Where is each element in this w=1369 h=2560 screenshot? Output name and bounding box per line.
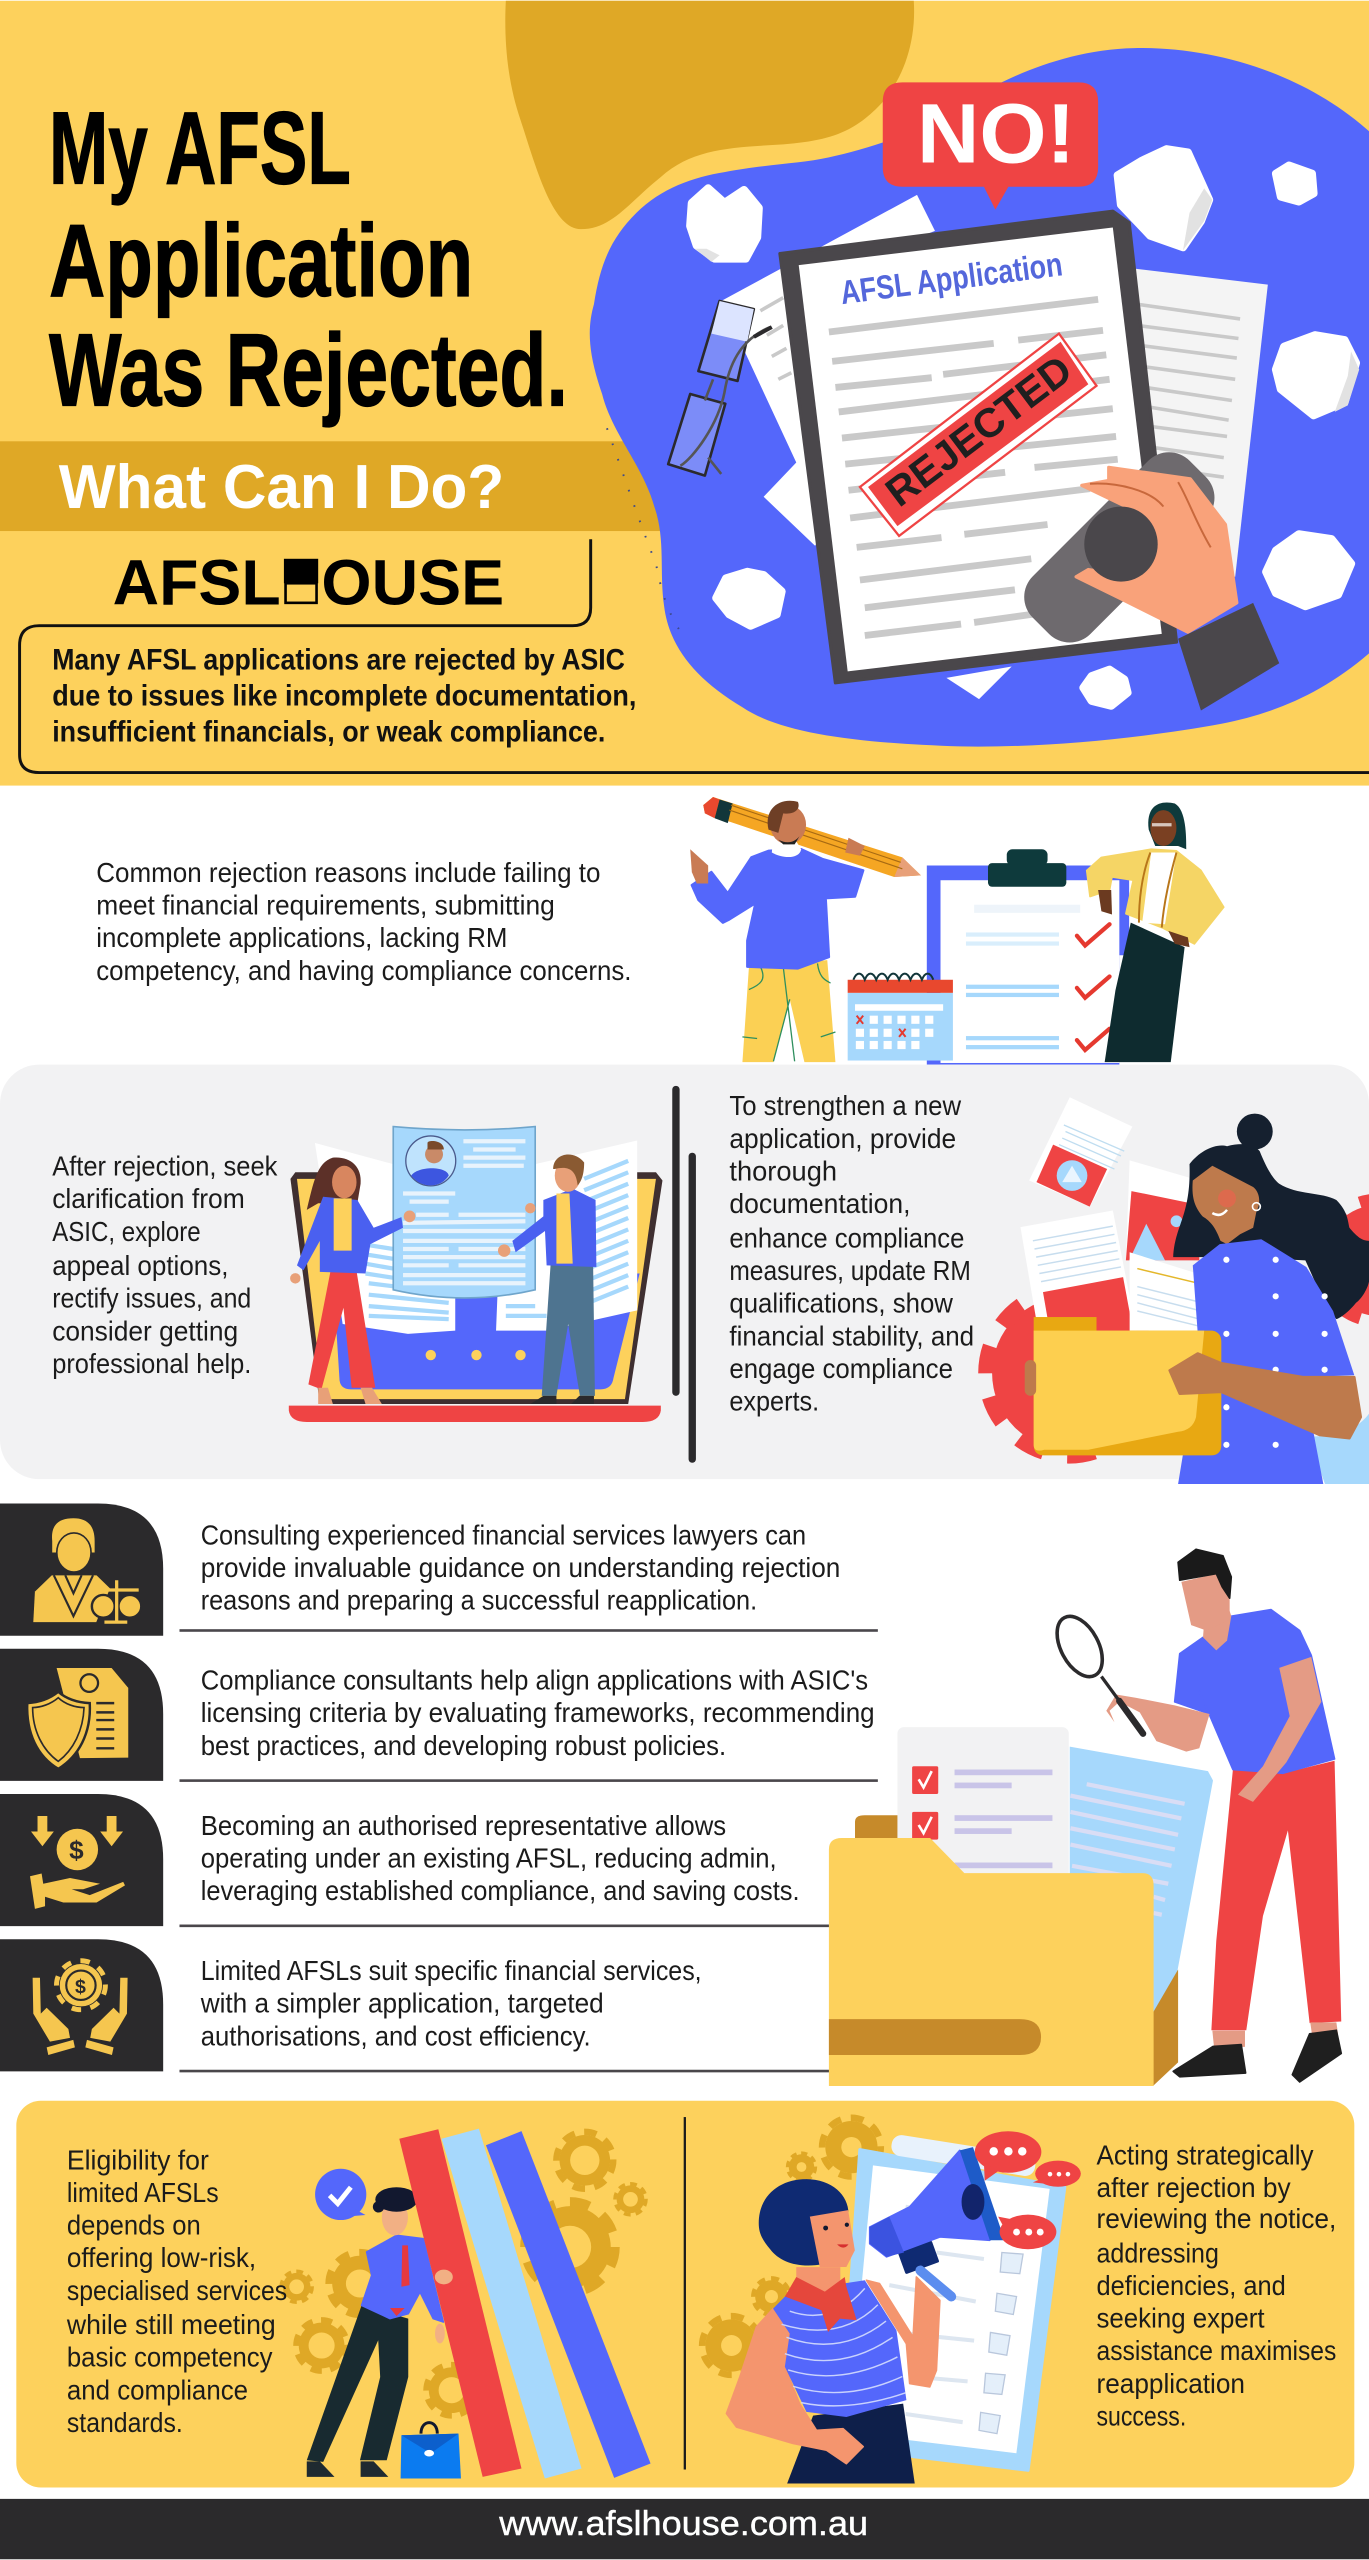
back paper right — [1132, 268, 1268, 577]
illustration: man with books — [307, 2129, 651, 2478]
text block: strategic: success. — [1097, 2400, 1186, 2431]
text: with a simpler application, targeted — [200, 1988, 604, 2019]
text: leveraging established compliance, and saving costs. — [201, 1875, 800, 1906]
pencil — [703, 797, 921, 877]
woman with yellow jacket — [1087, 802, 1224, 1062]
scarf — [785, 2277, 857, 2332]
illustration: man inspecting folder — [829, 1549, 1341, 2086]
text block: meet financial requirements, submitting — [96, 889, 555, 920]
text: Compliance consultants help align applications with ASIC's — [201, 1665, 868, 1696]
panel: after rejection and strengthen — [0, 1065, 1369, 1484]
text block: incomplete applications, lacking RM — [96, 922, 507, 953]
tab icon: hand with coin — [0, 1794, 163, 1926]
hand on book — [435, 2270, 453, 2284]
title — [49, 90, 568, 427]
shirt — [773, 2280, 906, 2417]
blue sheet — [1070, 1747, 1213, 2013]
back sheet right — [496, 1140, 637, 1331]
folder — [1034, 1317, 1097, 1332]
panel: hero header — [0, 1, 1369, 786]
intro callout box — [20, 539, 1369, 773]
text: licensing criteria by evaluating frameworks, recommending — [201, 1697, 875, 1728]
footer — [0, 2499, 1369, 2559]
tab icon: hand with coin: $ — [69, 1835, 84, 1865]
text block: eligibility: depends on — [67, 2210, 201, 2241]
text: best practices, and developing robust policies. — [201, 1730, 726, 1761]
light blue blob — [1309, 1414, 1369, 1484]
text: Becoming an authorised representative allows — [201, 1810, 726, 1841]
text block: strengthen: engage compliance — [729, 1353, 953, 1384]
clipboard — [840, 2150, 1065, 2470]
text: Consulting experienced financial services lawyers can — [201, 1519, 806, 1550]
books — [399, 2129, 521, 2477]
man — [307, 2187, 453, 2477]
text block: strategic: reviewing the notice, — [1097, 2203, 1336, 2234]
text block: after rejection: appeal options, — [52, 1250, 228, 1281]
dots: decorative trail — [607, 428, 679, 629]
blob: blue background — [590, 48, 1369, 747]
tab icon: hands with gear — [0, 1939, 163, 2071]
text block: eligibility — [66, 2144, 287, 2438]
illustration: rejected application — [668, 82, 1359, 711]
text block: competency, and having compliance concerns. — [96, 955, 631, 986]
skirt — [787, 2404, 915, 2484]
glasses — [668, 301, 772, 476]
tab icon: lawyer — [0, 1504, 163, 1636]
paper sheet — [799, 228, 1162, 671]
man — [498, 1154, 596, 1404]
back sheet left — [315, 1143, 455, 1334]
footer: www.afslhouse.com.au — [498, 2505, 868, 2543]
checklist paper — [897, 1727, 1069, 1882]
title: Application — [49, 203, 473, 318]
arm right — [866, 2277, 940, 2387]
check bubble — [315, 2169, 366, 2220]
tab icon: shield and document — [0, 1649, 163, 1781]
man — [1106, 1549, 1341, 2082]
subtitle: What Can I Do? — [59, 453, 504, 522]
text block: strengthen: thorough — [729, 1155, 837, 1186]
text — [201, 1665, 875, 1761]
text block: eligibility: specialised services — [67, 2275, 287, 2306]
text block: eligibility: basic competency — [67, 2342, 273, 2373]
tab icon: hands with gear: $ — [75, 1976, 86, 1998]
text block: after rejection: clarification from — [52, 1183, 245, 1214]
red gears — [987, 1200, 1369, 1455]
row: limited AFSLs — [0, 1939, 702, 2071]
divider — [684, 2117, 686, 2470]
text block: after rejection: professional help. — [52, 1348, 251, 1379]
text block: Common rejection reasons include failing to — [96, 857, 600, 888]
text block: strengthen: qualifications, show — [729, 1288, 954, 1319]
text block: eligibility: offering low-risk, — [67, 2242, 256, 2273]
row: compliance consultants — [0, 1649, 875, 1781]
text block: after rejection: ASIC, explore — [52, 1216, 201, 1247]
logo: AFSL House: OUSE — [321, 547, 504, 618]
text block: strengthen — [729, 1090, 974, 1417]
text block: strengthen: experts. — [729, 1386, 819, 1417]
band: subtitle background — [0, 441, 685, 531]
text block — [96, 857, 631, 986]
text — [200, 1955, 702, 2051]
text block: eligibility: and compliance — [67, 2374, 248, 2405]
callout: NO!: NO! — [917, 85, 1075, 180]
callout: NO! — [883, 82, 1098, 210]
clipboard — [780, 211, 1176, 683]
hair — [1173, 1144, 1369, 1319]
illustration: woman with megaphone — [726, 2131, 1081, 2484]
text block: strategic: after rejection by — [1097, 2172, 1291, 2203]
text block: after rejection — [52, 1151, 278, 1379]
text block: eligibility: while still meeting — [66, 2309, 276, 2340]
text block: strengthen: documentation, — [729, 1188, 910, 1219]
title: Was Rejected. — [49, 312, 568, 427]
text block: strengthen: financial stability, and — [729, 1320, 974, 1351]
clipboard — [927, 866, 1129, 1065]
back paper left — [721, 195, 935, 546]
rubber stamp and hand — [1012, 440, 1279, 711]
intro callout box: insufficient financials, or weak compliance. — [52, 716, 605, 749]
sweater — [692, 849, 863, 968]
gears — [281, 2118, 881, 2416]
panel: expert options — [0, 1504, 1341, 2086]
intro callout box: due to issues like incomplete documentation, — [52, 680, 636, 713]
illustration: people with checklist — [690, 797, 1224, 1065]
speech bubbles — [975, 2131, 1081, 2249]
paper balls — [690, 149, 1356, 706]
arm — [1170, 1353, 1361, 1438]
folder front — [1153, 1970, 1178, 2086]
text block: after rejection: rectify issues, and — [52, 1283, 251, 1314]
text block: strategic: seeking expert — [1097, 2303, 1265, 2334]
pants — [742, 960, 835, 1062]
text block: strengthen: measures, update RM — [729, 1255, 971, 1286]
center sheet — [393, 1127, 535, 1298]
text — [201, 1810, 800, 1906]
text: provide invaluable guidance on understanding rejection — [201, 1552, 840, 1583]
text — [201, 1519, 840, 1616]
text block: strategic: assistance maximises — [1097, 2335, 1336, 2366]
text: reasons and preparing a successful reapplication. — [201, 1585, 757, 1616]
text block: strategic: Acting strategically — [1097, 2139, 1314, 2170]
row: lawyers — [0, 1504, 840, 1636]
intro callout box: Many AFSL applications are rejected by ASIC — [52, 644, 625, 677]
text block: after rejection: consider getting — [52, 1315, 238, 1346]
logo: AFSL House: AFSL — [113, 547, 281, 618]
panel: common rejection reasons — [96, 797, 1224, 1065]
text: Limited AFSLs suit specific financial services, — [201, 1955, 702, 1986]
text block: after rejection: After rejection, seek — [52, 1151, 278, 1182]
text: authorisations, and cost efficiency. — [201, 2020, 591, 2051]
text block: strengthen: enhance compliance — [729, 1222, 964, 1253]
text block: strategic: deficiencies, and — [1097, 2270, 1286, 2301]
logo: AFSL House — [113, 547, 504, 618]
text block: strengthen: application, provide — [729, 1123, 956, 1154]
panel: limited AFSL eligibility and strategy — [16, 2101, 1354, 2487]
face — [1192, 1166, 1259, 1244]
dividers — [672, 1086, 696, 1463]
title: My AFSL — [49, 90, 351, 205]
text block: strengthen: To strengthen a new — [729, 1090, 962, 1121]
calendar — [848, 974, 953, 1061]
man with pencil — [690, 797, 921, 1062]
back paper tip — [946, 666, 1012, 699]
text block: eligibility: limited AFSLs — [67, 2177, 219, 2208]
head — [772, 836, 801, 857]
megaphone — [870, 2147, 1005, 2297]
dress — [1178, 1239, 1354, 1484]
text: operating under an existing AFSL, reducing admin, — [201, 1842, 777, 1873]
arm left — [726, 2309, 863, 2464]
text block: strategic — [1097, 2139, 1336, 2431]
base — [289, 1406, 661, 1422]
text block: strategic: reapplication — [1097, 2368, 1245, 2399]
magnifier — [1048, 1609, 1143, 1734]
floating documents — [1029, 1097, 1132, 1207]
neck and face — [796, 2267, 840, 2295]
illustration: tablet with resume — [289, 1127, 662, 1422]
row: authorised representative — [0, 1794, 800, 1926]
illustration: woman with folder — [987, 1097, 1369, 1484]
stamp: REJECTED: REJECTED — [877, 346, 1080, 515]
AFSL Application heading: AFSL Application — [838, 246, 1065, 312]
woman — [290, 1157, 415, 1404]
text block: eligibility: standards. — [67, 2407, 183, 2438]
text block: eligibility: Eligibility for — [67, 2144, 209, 2175]
folder tab — [855, 1815, 901, 1845]
briefcase — [401, 2423, 461, 2478]
text block: strategic: addressing — [1097, 2237, 1219, 2268]
